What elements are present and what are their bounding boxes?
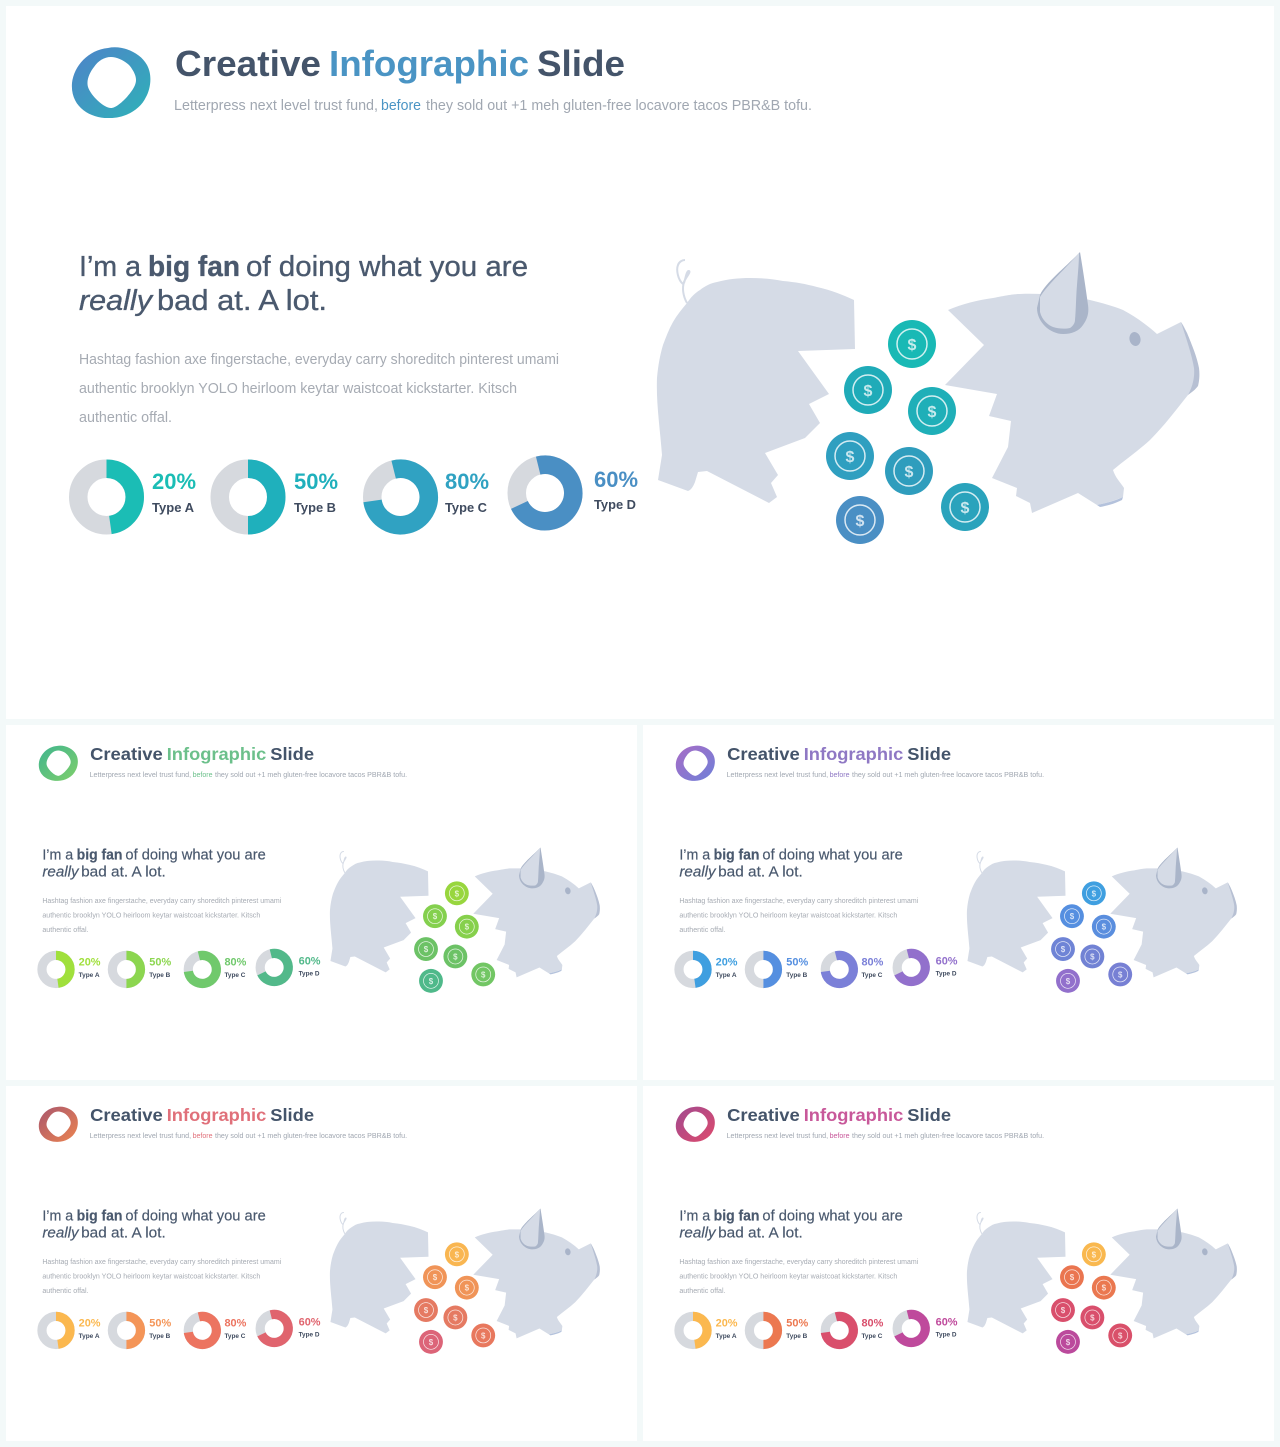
subtitle bbox=[90, 770, 407, 779]
donut: type D: Type D bbox=[299, 970, 320, 977]
coins: $ bbox=[465, 923, 470, 932]
piggy bank: rear half bbox=[967, 851, 1065, 972]
coins: $ bbox=[1066, 977, 1071, 986]
coins: $ bbox=[908, 337, 917, 354]
donut: type D bbox=[511, 459, 638, 527]
heading bbox=[42, 1208, 266, 1241]
donut: type D: 60% bbox=[299, 955, 321, 967]
heading: really bbox=[679, 864, 716, 880]
donut: type C: Type C bbox=[445, 500, 488, 515]
donut: type A bbox=[42, 1316, 101, 1344]
heading: big fan bbox=[77, 1208, 122, 1224]
piggy bank: rear half bbox=[967, 1212, 1065, 1333]
coins: $ bbox=[856, 513, 865, 530]
title: Infographic bbox=[167, 1105, 266, 1125]
subtitle: they sold out +1 meh gluten-free locavore tacos PBR&B tofu. bbox=[215, 1131, 407, 1140]
coins: $ bbox=[455, 1250, 460, 1259]
donut: type B: Type B bbox=[786, 972, 808, 979]
coins: $ bbox=[424, 945, 429, 954]
title bbox=[727, 1105, 951, 1125]
heading: of doing what you are bbox=[125, 1208, 266, 1224]
donut: type A: Type A bbox=[716, 1333, 737, 1340]
heading: I’m a bbox=[679, 847, 711, 863]
subtitle: before bbox=[193, 770, 213, 779]
heading bbox=[679, 1208, 903, 1241]
coins: $ bbox=[433, 1273, 438, 1282]
piggy bank: rear half bbox=[330, 851, 428, 972]
subtitle: they sold out +1 meh gluten-free locavore tacos PBR&B tofu. bbox=[215, 770, 407, 779]
donut: type C bbox=[822, 1313, 884, 1347]
heading: really bbox=[679, 1225, 716, 1241]
title: Infographic bbox=[167, 744, 266, 764]
title: Infographic bbox=[804, 744, 903, 764]
coins: $ bbox=[1070, 1273, 1075, 1282]
body text: authentic brooklyn YOLO heirloom keytar waistcoat kickstarter. Kitsch bbox=[679, 1272, 897, 1281]
donut: type B: 50% bbox=[294, 469, 338, 494]
donut: type D: Type D bbox=[594, 497, 636, 512]
subtitle bbox=[174, 98, 812, 114]
donut: type B bbox=[749, 955, 808, 983]
coins: $ bbox=[481, 970, 486, 979]
heading: of doing what you are bbox=[246, 251, 528, 283]
coins: $ bbox=[1092, 1250, 1097, 1259]
donut: type C bbox=[366, 463, 489, 531]
donut: type D bbox=[257, 950, 321, 984]
title: Slide bbox=[907, 744, 951, 764]
body text: authentic offal. bbox=[42, 925, 89, 934]
piggy bank: rear half bbox=[657, 260, 855, 503]
body text bbox=[42, 896, 282, 934]
donut: type C bbox=[185, 1313, 247, 1347]
body text: authentic offal. bbox=[42, 1286, 89, 1295]
donut: type A bbox=[679, 1316, 738, 1344]
heading bbox=[79, 251, 528, 317]
subtitle bbox=[90, 1131, 407, 1140]
subtitle: before bbox=[830, 770, 850, 779]
heading: of doing what you are bbox=[762, 847, 903, 863]
donut: type B bbox=[749, 1316, 808, 1344]
donut: type C: 80% bbox=[445, 469, 489, 494]
donut: type D: 60% bbox=[594, 467, 638, 492]
donut: type D bbox=[894, 950, 958, 984]
coins bbox=[826, 320, 989, 544]
heading: of doing what you are bbox=[125, 847, 266, 863]
panel: green slide bbox=[6, 725, 637, 1080]
subtitle: they sold out +1 meh gluten-free locavore tacos PBR&B tofu. bbox=[852, 770, 1044, 779]
donut: type C: 80% bbox=[861, 956, 884, 968]
subtitle: they sold out +1 meh gluten-free locavore tacos PBR&B tofu. bbox=[852, 1131, 1044, 1140]
coins: $ bbox=[928, 404, 937, 421]
body text bbox=[679, 1257, 919, 1295]
title: Creative bbox=[90, 1105, 163, 1125]
logo bbox=[72, 47, 150, 118]
heading: really bbox=[79, 285, 154, 317]
subtitle: they sold out +1 meh gluten-free locavore tacos PBR&B tofu. bbox=[426, 98, 812, 114]
donut: type A: 20% bbox=[716, 1317, 738, 1329]
coins: $ bbox=[1090, 1313, 1095, 1322]
coins: $ bbox=[424, 1306, 429, 1315]
coins: $ bbox=[1102, 1284, 1107, 1293]
coins: $ bbox=[961, 500, 970, 517]
coins: $ bbox=[429, 977, 434, 986]
donut: type B bbox=[112, 955, 171, 983]
title: Creative bbox=[90, 744, 163, 764]
donut: type B: 50% bbox=[149, 956, 171, 968]
body text: authentic brooklyn YOLO heirloom keytar waistcoat kickstarter. Kitsch bbox=[42, 1272, 260, 1281]
coins: $ bbox=[905, 464, 914, 481]
donut: type C: 80% bbox=[224, 956, 247, 968]
donut: type B bbox=[220, 469, 338, 525]
donut: type A: Type A bbox=[152, 500, 195, 515]
body text: authentic offal. bbox=[679, 925, 726, 934]
coins bbox=[414, 1242, 495, 1354]
logo bbox=[676, 1107, 715, 1142]
heading: I’m a bbox=[679, 1208, 711, 1224]
title: Slide bbox=[537, 43, 625, 84]
coins: $ bbox=[1102, 923, 1107, 932]
subtitle: before bbox=[830, 1131, 850, 1140]
coins: $ bbox=[433, 912, 438, 921]
donut: type B: Type B bbox=[786, 1333, 808, 1340]
heading: I’m a bbox=[79, 251, 142, 283]
donut: type B: 50% bbox=[786, 1317, 808, 1329]
heading bbox=[42, 847, 266, 880]
heading: I’m a bbox=[42, 847, 74, 863]
coins: $ bbox=[1066, 1338, 1071, 1347]
donut: type D bbox=[894, 1311, 958, 1345]
subtitle: Letterpress next level trust fund, bbox=[90, 1131, 191, 1140]
heading: bad at. A lot. bbox=[81, 864, 166, 880]
coins: $ bbox=[429, 1338, 434, 1347]
donut: type D: 60% bbox=[936, 955, 958, 967]
coins: $ bbox=[1092, 889, 1097, 898]
panel: coral slide bbox=[6, 1086, 637, 1441]
heading: really bbox=[42, 1225, 79, 1241]
coins: $ bbox=[1090, 952, 1095, 961]
heading: big fan bbox=[714, 1208, 759, 1224]
donut: type C: 80% bbox=[861, 1317, 884, 1329]
subtitle: Letterpress next level trust fund, bbox=[90, 770, 191, 779]
heading bbox=[679, 847, 903, 880]
title bbox=[175, 43, 625, 84]
title: Slide bbox=[270, 744, 314, 764]
coins: $ bbox=[453, 952, 458, 961]
title: Slide bbox=[907, 1105, 951, 1125]
coins: $ bbox=[1070, 912, 1075, 921]
body text bbox=[79, 352, 559, 426]
donut: type A: 20% bbox=[79, 1317, 101, 1329]
donut: type C bbox=[185, 952, 247, 986]
body text bbox=[679, 896, 919, 934]
heading: of doing what you are bbox=[762, 1208, 903, 1224]
subtitle: Letterpress next level trust fund, bbox=[174, 98, 378, 114]
subtitle: before bbox=[193, 1131, 213, 1140]
donut: type A: 20% bbox=[79, 956, 101, 968]
title: Infographic bbox=[804, 1105, 903, 1125]
title: Infographic bbox=[329, 43, 529, 84]
coins: $ bbox=[455, 889, 460, 898]
heading: big fan bbox=[714, 847, 759, 863]
title: Creative bbox=[175, 43, 321, 84]
piggy bank: rear half bbox=[330, 1212, 428, 1333]
coins: $ bbox=[481, 1331, 486, 1340]
panel: main slide bbox=[6, 6, 1274, 719]
piggy bank: front half bbox=[945, 252, 1199, 513]
heading: big fan bbox=[77, 847, 122, 863]
heading: really bbox=[42, 864, 79, 880]
body text: Hashtag fashion axe fingerstache, everyday carry shoreditch pinterest umami bbox=[42, 896, 282, 905]
subtitle bbox=[727, 770, 1044, 779]
subtitle: Letterpress next level trust fund, bbox=[727, 770, 828, 779]
coins: $ bbox=[864, 383, 873, 400]
donut: type D: Type D bbox=[936, 1331, 957, 1338]
coins: $ bbox=[465, 1284, 470, 1293]
donut: type A bbox=[42, 955, 101, 983]
donut: type A: Type A bbox=[79, 1333, 100, 1340]
coins: $ bbox=[1061, 1306, 1066, 1315]
heading: bad at. A lot. bbox=[718, 1225, 803, 1241]
donut: type D bbox=[257, 1311, 321, 1345]
donut: type B: 50% bbox=[149, 1317, 171, 1329]
piggy bank: front half bbox=[1110, 1209, 1237, 1338]
body text: authentic offal. bbox=[679, 1286, 726, 1295]
logo bbox=[39, 746, 78, 781]
coins: $ bbox=[1118, 970, 1123, 979]
title: Slide bbox=[270, 1105, 314, 1125]
title: Creative bbox=[727, 744, 800, 764]
donut: type A: 20% bbox=[152, 469, 196, 494]
coins bbox=[1051, 881, 1132, 993]
body text: Hashtag fashion axe fingerstache, everyday carry shoreditch pinterest umami bbox=[79, 352, 559, 368]
body text bbox=[42, 1257, 282, 1295]
body text: authentic offal. bbox=[79, 410, 172, 426]
donut: type C: 80% bbox=[224, 1317, 247, 1329]
donut: type B bbox=[112, 1316, 171, 1344]
heading: big fan bbox=[148, 251, 240, 283]
panel: magenta slide bbox=[643, 1086, 1274, 1441]
piggy bank: front half bbox=[473, 1209, 600, 1338]
logo bbox=[39, 1107, 78, 1142]
donut: type A: Type A bbox=[716, 972, 737, 979]
donut: type B: Type B bbox=[149, 972, 171, 979]
donut: type C bbox=[822, 952, 884, 986]
body text: authentic brooklyn YOLO heirloom keytar waistcoat kickstarter. Kitsch bbox=[42, 911, 260, 920]
coins bbox=[414, 881, 495, 993]
donut: type D: 60% bbox=[299, 1316, 321, 1328]
title bbox=[727, 744, 951, 764]
heading: bad at. A lot. bbox=[718, 864, 803, 880]
body text: Hashtag fashion axe fingerstache, everyday carry shoreditch pinterest umami bbox=[42, 1257, 282, 1266]
donut: type A: 20% bbox=[716, 956, 738, 968]
heading: I’m a bbox=[42, 1208, 74, 1224]
heading: bad at. A lot. bbox=[157, 285, 327, 317]
logo bbox=[676, 746, 715, 781]
donut: type C: Type C bbox=[224, 972, 246, 979]
donut: type D: Type D bbox=[299, 1331, 320, 1338]
donut: type B: Type B bbox=[149, 1333, 171, 1340]
donut: type C: Type C bbox=[224, 1333, 246, 1340]
title: Creative bbox=[727, 1105, 800, 1125]
piggy bank: front half bbox=[473, 848, 600, 977]
donut: type A: Type A bbox=[79, 972, 100, 979]
title bbox=[90, 1105, 314, 1125]
subtitle bbox=[727, 1131, 1044, 1140]
donut: type B: Type B bbox=[294, 500, 336, 515]
subtitle: before bbox=[381, 98, 421, 114]
coins: $ bbox=[1118, 1331, 1123, 1340]
body text: Hashtag fashion axe fingerstache, everyday carry shoreditch pinterest umami bbox=[679, 1257, 919, 1266]
panel: purple slide bbox=[643, 725, 1274, 1080]
donut: type D: Type D bbox=[936, 970, 957, 977]
body text: authentic brooklyn YOLO heirloom keytar waistcoat kickstarter. Kitsch bbox=[679, 911, 897, 920]
subtitle: Letterpress next level trust fund, bbox=[727, 1131, 828, 1140]
donut: type C: Type C bbox=[861, 972, 883, 979]
body text: Hashtag fashion axe fingerstache, everyday carry shoreditch pinterest umami bbox=[679, 896, 919, 905]
coins: $ bbox=[1061, 945, 1066, 954]
heading: bad at. A lot. bbox=[81, 1225, 166, 1241]
donut: type C: Type C bbox=[861, 1333, 883, 1340]
piggy bank: front half bbox=[1110, 848, 1237, 977]
body text: authentic brooklyn YOLO heirloom keytar waistcoat kickstarter. Kitsch bbox=[79, 381, 517, 397]
donut: type A bbox=[78, 469, 196, 525]
donut: type D: 60% bbox=[936, 1316, 958, 1328]
donut: type B: 50% bbox=[786, 956, 808, 968]
title bbox=[90, 744, 314, 764]
coins bbox=[1051, 1242, 1132, 1354]
donut: type A bbox=[679, 955, 738, 983]
coins: $ bbox=[453, 1313, 458, 1322]
coins: $ bbox=[846, 449, 855, 466]
